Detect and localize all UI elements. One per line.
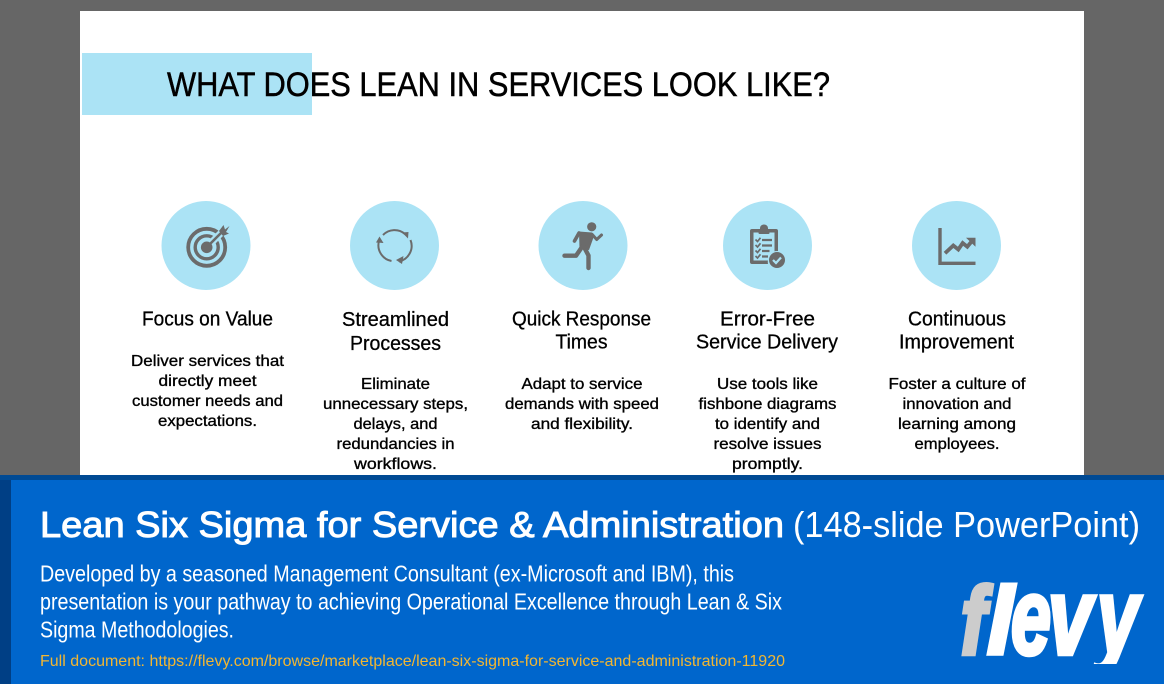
title: WHAT DOES LEAN IN SERVICES LOOK LIKE? <box>167 66 830 104</box>
heading <box>342 309 449 355</box>
description: directly meet <box>158 373 257 390</box>
slide panel <box>80 11 1084 481</box>
description: promptly. <box>732 456 803 473</box>
description: resolve issues <box>714 436 822 453</box>
flevy logo <box>961 582 1144 664</box>
heading: Error-Free <box>720 308 815 330</box>
description: employees. <box>914 436 1000 453</box>
description: learning among <box>898 416 1016 433</box>
description <box>131 353 285 430</box>
description: demands with speed <box>505 396 659 413</box>
description: delays, and <box>354 416 438 433</box>
heading: Service Delivery <box>696 332 838 354</box>
description: Use tools like <box>717 376 818 393</box>
column: focus on value <box>131 201 285 430</box>
description: to identify and <box>715 416 820 433</box>
column: continuous improvement <box>888 201 1026 453</box>
icon: runner <box>538 201 628 290</box>
description: workflows. <box>353 456 437 473</box>
flevy logo: l <box>987 568 1016 675</box>
heading <box>512 308 651 354</box>
description: Adapt to service <box>522 376 643 393</box>
icon: rising line chart <box>912 201 1001 290</box>
heading: Continuous <box>908 308 1006 330</box>
description: customer needs and <box>132 393 283 410</box>
flevy logo: y <box>1094 556 1142 677</box>
description: and flexibility. <box>531 416 633 433</box>
banner title: (148-slide PowerPoint) <box>793 504 1140 545</box>
column: quick response times <box>505 201 659 433</box>
heading: Quick Response <box>512 308 651 330</box>
document link: Full document: https://flevy.com/browse/marketplace/lean-six-sigma-for-service-and-administration-11920 <box>40 653 785 670</box>
flevy logo: v <box>1048 557 1095 678</box>
description: expectations. <box>158 413 257 430</box>
description <box>888 376 1026 453</box>
flevy logo: e <box>1011 556 1051 678</box>
column: error-free service delivery <box>696 201 838 473</box>
banner title <box>40 504 1140 545</box>
heading: Improvement <box>899 332 1014 354</box>
banner description <box>40 560 782 642</box>
description <box>505 376 659 433</box>
icon: cycle arrows <box>350 201 439 290</box>
banner description: Developed by a seasoned Management Consultant (ex-Microsoft and IBM), this <box>40 560 734 586</box>
heading <box>899 308 1014 354</box>
banner description: Sigma Methodologies. <box>40 616 234 642</box>
description: redundancies in <box>336 436 454 453</box>
description: Foster a culture of <box>888 376 1026 393</box>
icon: clipboard checklist <box>723 201 812 290</box>
description: unnecessary steps, <box>323 396 468 413</box>
icon: target <box>162 201 250 290</box>
heading <box>696 308 838 354</box>
description: Deliver services that <box>131 353 285 370</box>
description <box>698 376 836 473</box>
heading: Processes <box>350 333 441 355</box>
heading: Times <box>556 332 608 354</box>
heading: Streamlined <box>342 309 449 331</box>
description: innovation and <box>902 396 1012 413</box>
promo banner <box>0 475 1164 684</box>
column: streamlined processes <box>323 201 468 473</box>
description <box>323 376 468 473</box>
description: Eliminate <box>361 376 430 393</box>
description: fishbone diagrams <box>698 396 836 413</box>
flevy logo: f <box>961 568 992 675</box>
banner title: Lean Six Sigma for Service & Administration <box>40 504 784 545</box>
title accent block <box>82 53 312 115</box>
banner description: presentation is your pathway to achieving Operational Excellence through Lean & Six <box>40 588 782 614</box>
heading: Focus on Value <box>142 308 273 330</box>
